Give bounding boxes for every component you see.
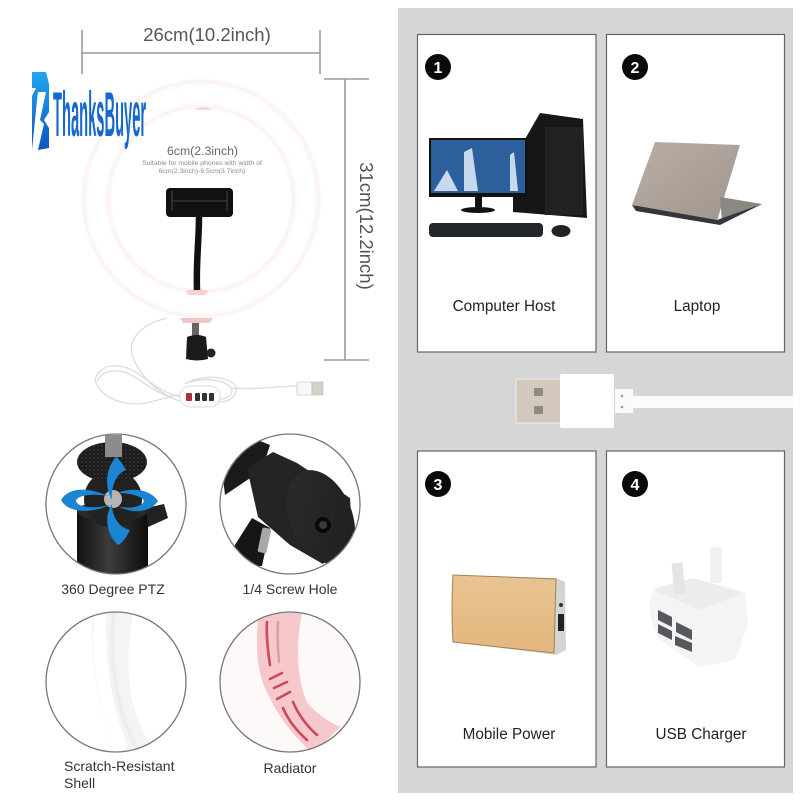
logo: ThanksBuyer: ThanksBuyer xyxy=(53,80,146,150)
USB plug xyxy=(516,374,793,428)
badge 1 xyxy=(425,54,451,80)
icon: laptop xyxy=(632,142,762,225)
width dimension xyxy=(82,24,320,74)
detail: scratch-resistant shell xyxy=(46,610,186,752)
badge 4 xyxy=(622,471,648,497)
badge 4: 4 xyxy=(631,477,640,494)
phone size label: Suitable for mobile phones with width of xyxy=(142,160,262,167)
label: Computer Host: Computer Host xyxy=(453,298,556,315)
ball head mount xyxy=(186,323,216,360)
height dimension xyxy=(324,79,377,360)
badge 2 xyxy=(622,54,648,80)
phone size label: 6cm(2.3inch) xyxy=(167,144,238,158)
label: 1/4 Screw Hole: 1/4 Screw Hole xyxy=(243,581,338,597)
label: 360 Degree PTZ: 360 Degree PTZ xyxy=(61,581,165,597)
height dimension: 31cm(12.2inch) xyxy=(356,162,377,290)
detail: 360 degree PTZ xyxy=(46,434,186,580)
power cable with controller xyxy=(95,318,323,407)
card 4: USB charger xyxy=(606,451,784,767)
badge 3: 3 xyxy=(434,477,443,494)
phone size label: 6cm(2.3inch)-9.5cm(3.7inch) xyxy=(159,168,245,175)
ring light xyxy=(96,94,306,323)
card 1: computer host xyxy=(418,34,596,352)
icon: UK plug charger xyxy=(650,547,748,667)
detail: radiator xyxy=(220,608,360,754)
badge 1: 1 xyxy=(434,60,443,77)
label: Scratch-Resistant Shell: Shell xyxy=(64,775,95,791)
card 3: mobile power xyxy=(418,451,596,767)
icon: desktop computer xyxy=(429,113,587,237)
label: Scratch-Resistant Shell: Scratch-Resistant xyxy=(64,758,175,774)
label: USB Charger: USB Charger xyxy=(656,726,746,743)
label: Laptop: Laptop xyxy=(674,298,720,315)
label: Radiator: Radiator xyxy=(264,760,317,776)
icon: power bank xyxy=(452,575,566,655)
label: Mobile Power: Mobile Power xyxy=(463,726,555,743)
connection panel background xyxy=(398,8,793,793)
width dimension: 26cm(10.2inch) xyxy=(143,24,271,45)
badge 2: 2 xyxy=(631,60,640,77)
card 2: laptop xyxy=(606,34,784,352)
badge 3 xyxy=(425,471,451,497)
phone size label xyxy=(142,144,262,175)
phone holder xyxy=(166,188,233,290)
detail: screw hole xyxy=(220,434,368,574)
